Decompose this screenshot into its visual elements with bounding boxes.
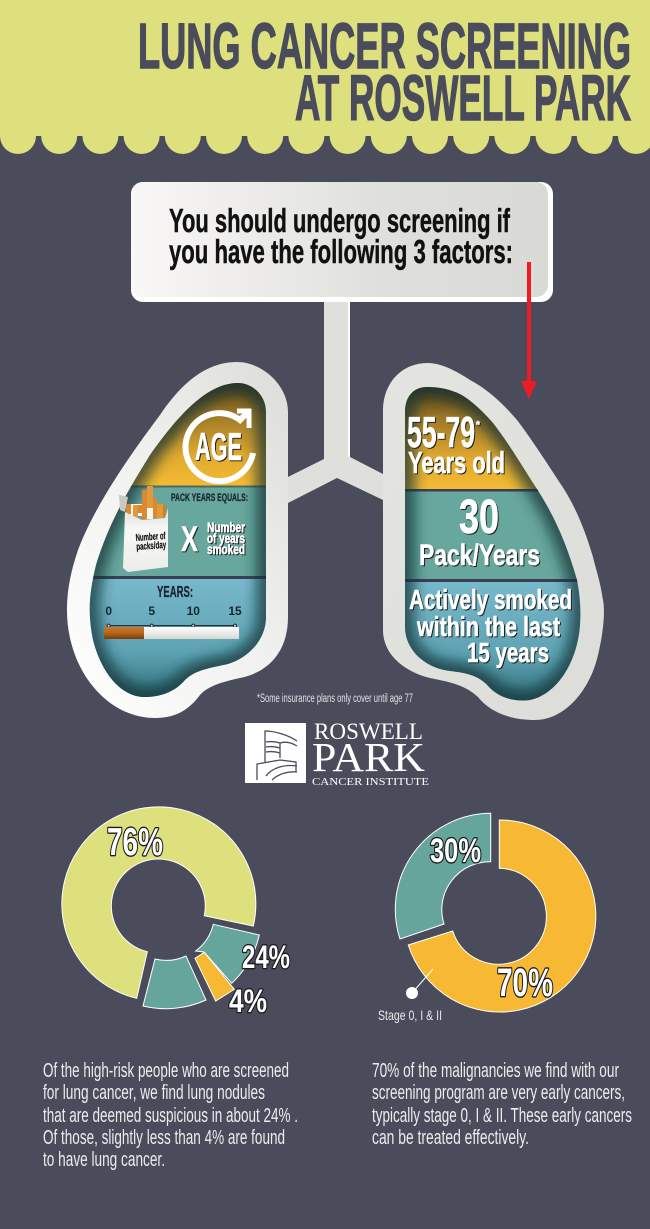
logo wordmark: PARK	[312, 734, 425, 780]
text block: nodules explanation	[43, 1060, 298, 1171]
label: 4 percent: 4%	[229, 983, 267, 1019]
years scale	[105, 604, 242, 627]
years scale: 15	[228, 604, 242, 618]
text block: early cancers explanation	[372, 1060, 632, 1149]
years scale: 10	[187, 604, 200, 618]
multiply sign: X	[181, 520, 198, 559]
text block: nodules explanation: Of the high-risk people who are screened	[43, 1060, 289, 1082]
pack years criterion: 30	[459, 491, 499, 544]
panel: left lung	[67, 362, 288, 718]
smoking recency criterion	[409, 584, 572, 668]
header banner with scalloped edge	[0, 0, 650, 154]
years heading: YEARS:	[157, 584, 193, 601]
logo wordmark: CANCER INSTITUTE	[312, 777, 429, 788]
age criterion	[407, 408, 505, 480]
chart: screening nodules donut	[62, 807, 259, 1009]
years smoked text	[207, 519, 245, 557]
trachea and bronchi connector	[288, 300, 383, 503]
text block: nodules explanation: to have lung cancer.	[43, 1149, 165, 1171]
age label: AGE	[195, 426, 242, 469]
smoking recency criterion: 15 years	[467, 637, 549, 668]
pack years heading: PACK YEARS EQUALS:	[171, 492, 248, 504]
pack years criterion	[419, 491, 540, 572]
pack label	[135, 531, 167, 553]
text block: nodules explanation: for lung cancer, we find lung nodules	[43, 1082, 265, 1104]
years smoked text: of years	[207, 530, 245, 546]
logo wordmark: ROSWELL	[314, 719, 423, 744]
age criterion: 55-79	[407, 408, 475, 457]
icon: cigarette	[104, 627, 239, 639]
years smoked text: smoked	[207, 541, 245, 557]
title	[138, 10, 631, 134]
pack years criterion: Pack/Years	[419, 539, 540, 572]
logo: Roswell Park Cancer Institute	[245, 719, 429, 788]
label: 30 percent: 30%	[430, 832, 481, 870]
pack label: packs/day	[136, 540, 167, 553]
icon: age ring	[186, 411, 253, 481]
label: 70 percent: 70%	[497, 961, 553, 1005]
logo wordmark	[312, 719, 429, 788]
chart: early stage donut	[395, 813, 596, 1012]
label: 24 percent: 24%	[242, 939, 290, 975]
smoking recency criterion: Actively smoked	[409, 584, 572, 615]
age criterion: Years old	[408, 445, 505, 480]
callout: stage marker: Stage 0, I & II	[378, 1007, 442, 1023]
years scale: 5	[148, 604, 155, 618]
smoking recency criterion: within the last	[416, 611, 560, 642]
years smoked text: Number	[207, 519, 245, 535]
panel: right lung	[383, 363, 604, 720]
red arrow	[521, 262, 537, 399]
text block: nodules explanation: that are deemed suspicious in about 24% .	[43, 1105, 298, 1127]
text block: nodules explanation: Of those, slightly less than 4% are found	[43, 1127, 285, 1149]
callout: stage marker	[378, 969, 442, 1023]
icon: cigarette pack	[119, 486, 168, 572]
pack label: Number of	[135, 531, 166, 544]
label: 76 percent: 76%	[107, 821, 163, 864]
logo mark	[245, 723, 306, 783]
footnote: *Some insurance plans only cover until age 77	[257, 693, 413, 705]
years scale: 0	[105, 604, 112, 618]
callout text	[169, 202, 513, 270]
age criterion: *	[476, 420, 480, 431]
text block: early cancers explanation: can be treated effectively.	[372, 1127, 529, 1149]
callout box	[131, 182, 553, 302]
